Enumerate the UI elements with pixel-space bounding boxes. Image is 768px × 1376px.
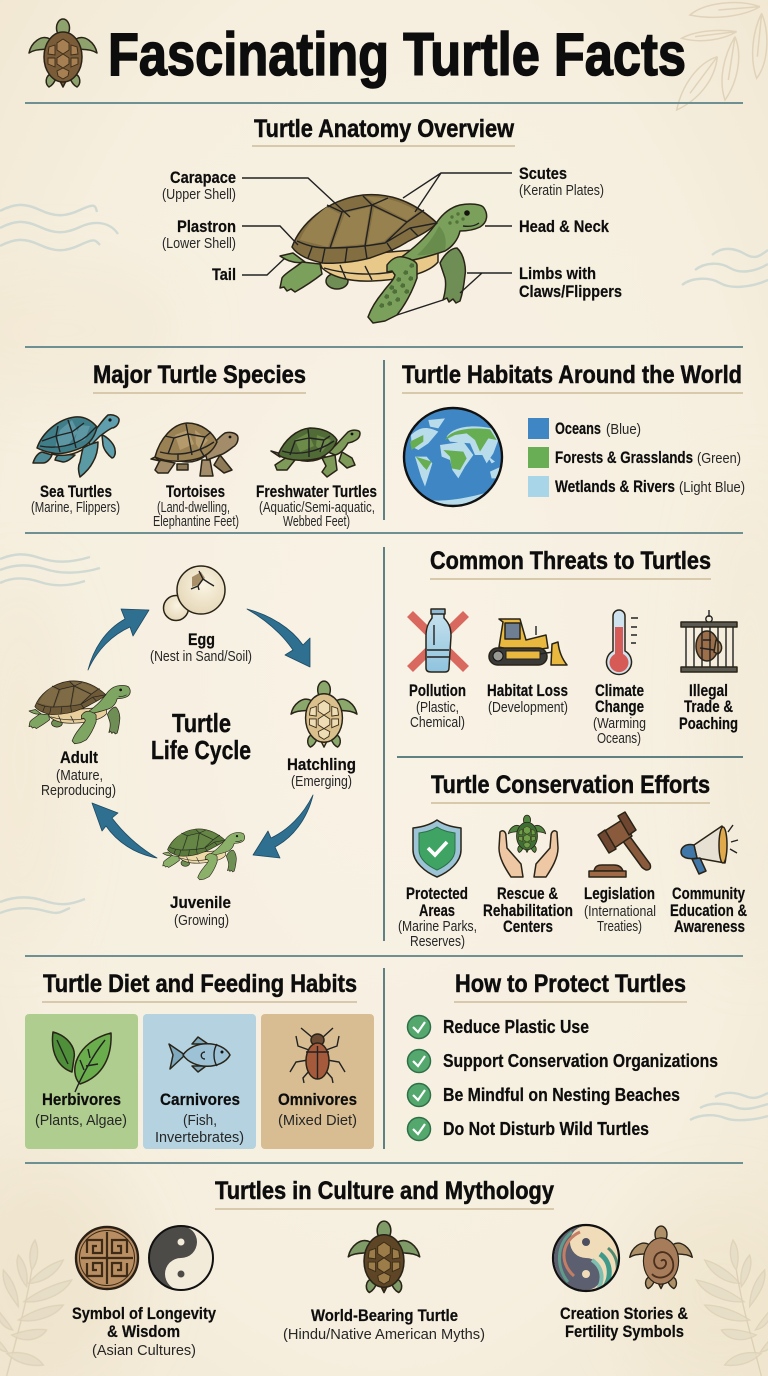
icon: globe	[404, 408, 502, 508]
threat labels: (Warming	[593, 715, 646, 732]
arrow: adult to egg	[88, 609, 149, 670]
heading: species: Major Turtle Species	[93, 361, 306, 389]
panel: life cycle	[29, 566, 357, 929]
icon: hands with turtle	[499, 815, 558, 877]
species labels: (Land-dwelling,	[157, 499, 230, 516]
card: herbivores	[25, 1014, 138, 1149]
card: herbivores: Herbivores	[42, 1090, 121, 1109]
labels: right	[519, 164, 622, 301]
icon: bulldozer	[489, 619, 567, 665]
heading: threats: Common Threats to Turtles	[430, 547, 711, 575]
card: omnivores: Omnivores	[278, 1090, 357, 1109]
culture labels: (Asian Cultures)	[92, 1342, 196, 1359]
icon: bottle with cross	[410, 609, 466, 672]
item: nesting beaches: Be Mindful on Nesting Beaches	[443, 1085, 680, 1105]
species labels: (Aquatic/Semi-aquatic,	[259, 499, 375, 516]
conservation labels: Education &	[670, 901, 747, 920]
legend: Oceans	[555, 419, 601, 438]
legend: Forests & Grasslands	[555, 448, 693, 467]
culture labels: Creation Stories &	[560, 1304, 688, 1323]
item: nesting beaches	[408, 1084, 680, 1106]
labels: right: Limbs with	[519, 264, 596, 283]
legend: (Blue)	[606, 421, 641, 438]
labels: left: Carapace	[170, 168, 236, 187]
arrow: hatchling to juvenile	[253, 795, 313, 858]
labels: left: (Lower Shell)	[162, 235, 236, 252]
icon: egg	[164, 566, 225, 620]
center title	[151, 708, 251, 765]
cycle labels	[41, 630, 356, 929]
threat labels: Poaching	[679, 714, 738, 733]
culture labels: Fertility Symbols	[565, 1322, 684, 1341]
culture labels: (Hindu/Native American Myths)	[283, 1326, 485, 1343]
icon: gavel	[589, 812, 650, 877]
panel: habitats	[402, 361, 745, 508]
icon: sea turtle	[33, 415, 119, 477]
icon: megaphone	[681, 825, 738, 874]
item: reduce plastic: Reduce Plastic Use	[443, 1017, 589, 1037]
cycle labels: Reproducing)	[41, 782, 116, 799]
conservation labels: Treaties)	[597, 918, 642, 935]
card: omnivores	[261, 1014, 374, 1149]
icon: yin yang	[149, 1226, 213, 1290]
labels: left	[162, 168, 236, 284]
culture labels	[72, 1304, 688, 1359]
labels: left: (Upper Shell)	[162, 186, 236, 203]
conservation labels: (Marine Parks,	[398, 918, 477, 935]
callout lines	[242, 173, 512, 315]
card: carnivores: (Fish,	[183, 1112, 217, 1129]
species labels: Sea Turtles	[40, 482, 112, 501]
cycle labels: Juvenile	[170, 893, 231, 912]
heading: conservation: Turtle Conservation Efforts	[431, 771, 710, 799]
threat labels: Change	[595, 697, 644, 716]
icon: adult turtle	[29, 681, 130, 744]
cycle labels: Adult	[60, 748, 98, 767]
card: omnivores: (Mixed Diet)	[278, 1112, 357, 1129]
icon: spiral turtle	[630, 1226, 692, 1289]
icon: world-bearing turtle	[348, 1221, 420, 1292]
icon: freshwater turtle	[271, 428, 360, 477]
conservation labels: Legislation	[584, 884, 655, 903]
panel: threats	[409, 547, 738, 747]
card: carnivores: Invertebrates)	[155, 1129, 244, 1146]
icon: shield	[413, 820, 461, 877]
threat labels: Pollution	[409, 681, 466, 700]
item: reduce plastic	[408, 1016, 589, 1038]
threat labels: Trade &	[684, 697, 733, 716]
threat labels: Oceans)	[597, 730, 641, 747]
culture labels: & Wisdom	[107, 1322, 180, 1341]
threat labels: Illegal	[689, 681, 728, 700]
species labels	[31, 482, 377, 530]
legend: Wetlands & Rivers	[555, 477, 675, 496]
labels: right: (Keratin Plates)	[519, 182, 604, 199]
center title: Turtle	[172, 708, 231, 738]
panel: culture	[72, 1177, 692, 1359]
cycle labels: Hatchling	[287, 755, 356, 774]
heading: protect: How to Protect Turtles	[455, 970, 686, 998]
icon: juvenile turtle	[163, 829, 245, 880]
arrow: juvenile to adult	[92, 803, 157, 858]
icon: cage	[681, 610, 737, 672]
item: do not disturb: Do Not Disturb Wild Turtles	[443, 1119, 649, 1139]
labels: right: Scutes	[519, 164, 567, 183]
threat labels: Chemical)	[410, 714, 465, 731]
conservation labels: Protected	[406, 884, 468, 903]
culture labels: World-Bearing Turtle	[311, 1306, 458, 1325]
panel: diet	[25, 970, 374, 1149]
panel: conservation	[398, 771, 747, 950]
item: do not disturb	[408, 1118, 649, 1140]
conservation labels: Reserves)	[410, 933, 465, 950]
icon: tortoise	[151, 423, 238, 476]
cycle labels: (Mature,	[56, 767, 103, 784]
conservation labels: Centers	[503, 917, 553, 936]
labels: left: Tail	[212, 265, 236, 284]
conservation labels: (International	[584, 903, 656, 920]
heading: anatomy: Turtle Anatomy Overview	[254, 115, 514, 143]
culture labels: Symbol of Longevity	[72, 1304, 216, 1323]
diagram: turtle anatomy illustration	[280, 195, 487, 323]
icon: hatchling	[291, 681, 357, 747]
item: support organizations	[408, 1050, 718, 1072]
center title: Life Cycle	[151, 735, 251, 765]
threat labels: Climate	[595, 681, 644, 700]
conservation labels: Areas	[419, 901, 455, 920]
species labels: Tortoises	[166, 482, 225, 501]
labels: right: Head & Neck	[519, 217, 609, 236]
heading: culture: Turtles in Culture and Mythology	[215, 1177, 554, 1205]
conservation labels: Awareness	[674, 917, 745, 936]
icon: swirl yin yang	[553, 1225, 619, 1292]
legend: (Green)	[697, 450, 741, 467]
panel: how to protect	[408, 970, 718, 1140]
card: carnivores	[143, 1014, 256, 1149]
card: carnivores: Carnivores	[160, 1090, 240, 1109]
conservation labels: Rescue &	[497, 884, 558, 903]
panel: species	[31, 361, 377, 530]
conservation labels: Rehabilitation	[483, 901, 573, 920]
legend	[528, 418, 745, 497]
threat labels: (Plastic,	[416, 699, 459, 716]
threat labels	[409, 681, 738, 747]
species labels: Freshwater Turtles	[256, 482, 377, 501]
labels: right: Claws/Flippers	[519, 282, 622, 301]
arrow: egg to hatchling	[247, 609, 310, 667]
icon: thermometer	[606, 610, 638, 674]
cycle labels: (Nest in Sand/Soil)	[150, 648, 252, 665]
item: support organizations: Support Conservation Organizations	[443, 1051, 718, 1071]
cycle labels: (Emerging)	[291, 773, 352, 790]
species labels: (Marine, Flippers)	[31, 499, 120, 516]
species labels: Elephantine Feet)	[153, 513, 239, 530]
labels: left: Plastron	[177, 217, 236, 236]
icon: longevity coin	[76, 1227, 138, 1289]
legend: (Light Blue)	[679, 479, 745, 496]
panel: anatomy	[162, 115, 622, 323]
species labels: Webbed Feet)	[283, 513, 350, 530]
threat labels: Habitat Loss	[487, 681, 568, 700]
cycle labels: Egg	[188, 630, 215, 649]
cycle labels: (Growing)	[174, 912, 229, 929]
conservation labels	[398, 884, 747, 950]
icon: header turtle	[29, 19, 97, 87]
heading: diet: Turtle Diet and Feeding Habits	[43, 970, 357, 998]
conservation labels: Community	[672, 884, 745, 903]
card: herbivores: (Plants, Algae)	[35, 1112, 127, 1129]
threat labels: (Development)	[488, 699, 568, 716]
